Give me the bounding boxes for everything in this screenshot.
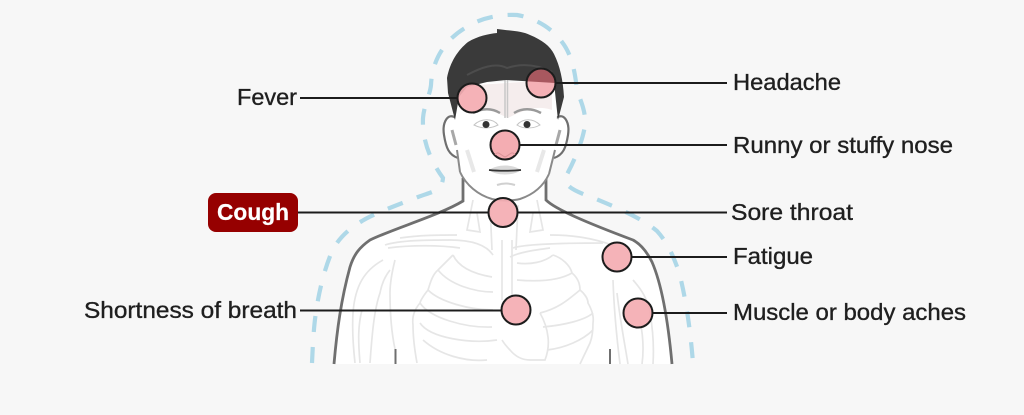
symptom marker: throat <box>488 198 518 227</box>
symptom marker: fever <box>458 84 486 112</box>
symptom marker: nose <box>490 130 520 160</box>
symptom marker: breath <box>502 296 530 324</box>
cough badge <box>208 193 298 232</box>
label: headache: Headache <box>733 69 841 95</box>
hair <box>447 29 564 120</box>
label: muscle or body aches: Muscle or body aches <box>733 299 966 325</box>
label: runny or stuffy nose: Runny or stuffy nose <box>733 132 953 158</box>
label: shortness of breath: Shortness of breath <box>84 297 297 323</box>
face outline <box>455 80 557 200</box>
connector lines <box>298 83 727 313</box>
symptom marker: fatigue <box>602 242 632 272</box>
mouth <box>489 166 521 174</box>
hair highlights <box>467 65 552 75</box>
anatomy: muscles, collarbones and ribs <box>353 200 653 364</box>
symptom marker: headache <box>526 68 556 98</box>
figure: head and face <box>444 29 568 200</box>
ears <box>444 116 568 158</box>
label: sore throat: Sore throat <box>731 199 854 225</box>
arm gaps <box>396 349 610 364</box>
infographic: symptoms on a human figure <box>84 12 966 364</box>
eyebrows <box>473 109 541 113</box>
label: fatigue: Fatigue <box>733 243 813 269</box>
label: fever: Fever <box>237 84 297 110</box>
cough badge: Cough <box>217 199 289 225</box>
symptom marker: muscle <box>624 298 652 328</box>
forehead shading <box>462 80 552 118</box>
figure: neck and torso <box>334 170 672 364</box>
dashed blue outline around body <box>312 15 693 363</box>
cheek shading <box>467 150 544 172</box>
eyes <box>474 120 540 128</box>
